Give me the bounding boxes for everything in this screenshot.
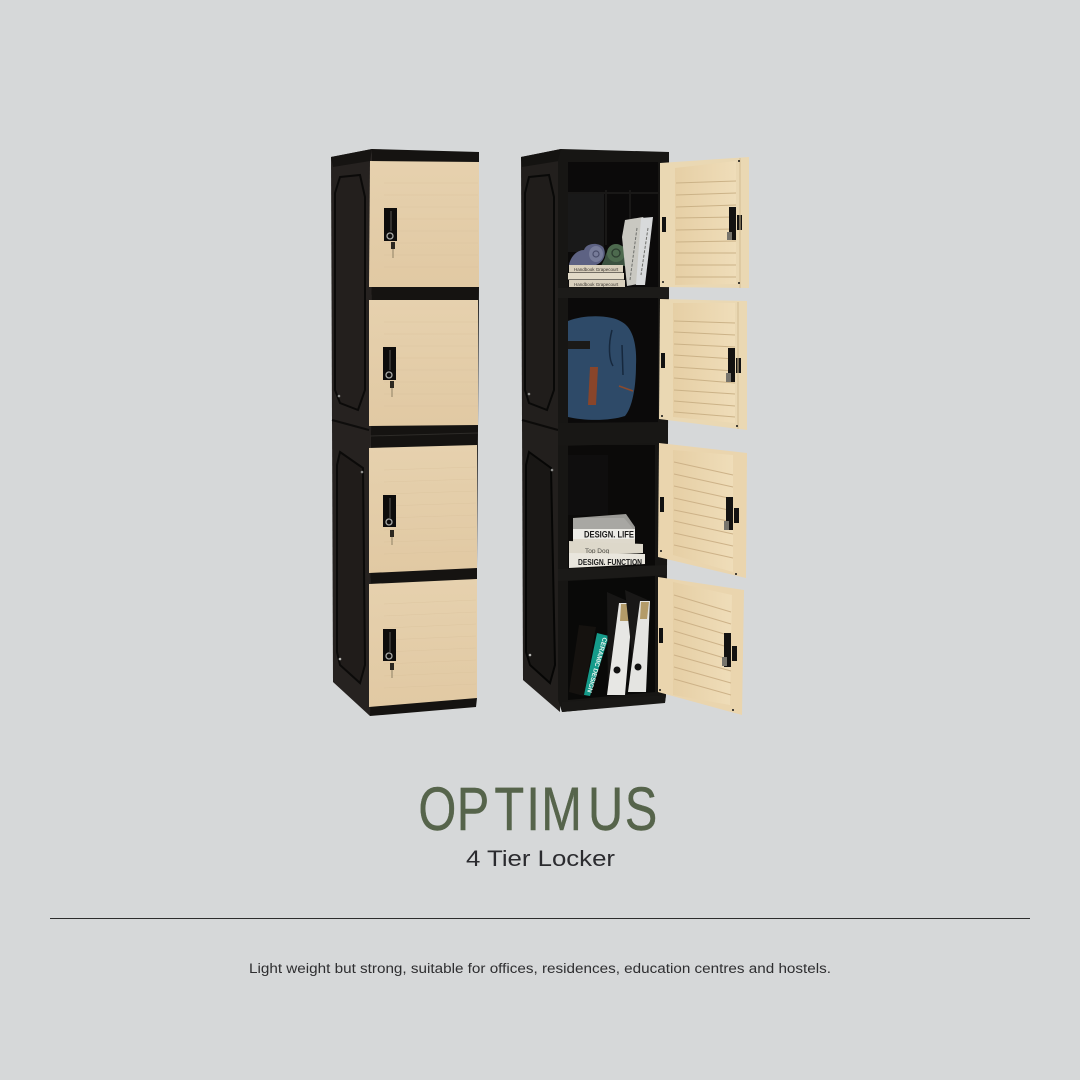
locker side panel (331, 149, 372, 716)
design books stack: Top Dog (585, 548, 610, 555)
lock and key 2 (383, 347, 396, 397)
lock and key 1 (384, 208, 397, 258)
divider line (50, 918, 1030, 919)
teal ceramic design book: CERAMIC DESIGN (585, 636, 608, 694)
backpack (568, 316, 636, 420)
top cabinet cavity (568, 162, 658, 287)
open door 4 (658, 577, 744, 715)
open locker side panel (521, 149, 561, 712)
binder 2 (625, 590, 650, 692)
design books stack: DESIGN. FUNCTION (578, 557, 642, 567)
dark books (569, 625, 596, 696)
product: closed locker (331, 149, 479, 716)
product: open locker with stored items (521, 149, 749, 715)
binder 1 (607, 592, 633, 695)
blankets (569, 244, 629, 266)
lock and key 3 (383, 495, 396, 545)
title: OPTIMUS (418, 775, 657, 843)
door 4 (369, 579, 477, 707)
stacked books top shelf: Handbook Grapecourt (574, 267, 619, 272)
door 1 (369, 161, 479, 287)
door 3 (369, 445, 477, 573)
open locker front frame (558, 149, 669, 712)
door 2 (369, 300, 478, 426)
shelf 2 (558, 565, 667, 581)
stacked books top shelf (568, 265, 625, 287)
base (562, 695, 666, 712)
lock and key 4 (383, 629, 396, 678)
subtitle: 4 Tier Locker (466, 846, 615, 871)
open door 2 (659, 299, 747, 430)
upright books (622, 217, 653, 286)
open door 1 (660, 157, 749, 288)
door faint ribs (384, 183, 478, 688)
third cabinet cavity (568, 445, 655, 569)
design books stack: DESIGN. LIFE (584, 530, 634, 540)
open door 3 (658, 443, 747, 578)
fourth cabinet cavity (568, 576, 655, 700)
second cabinet cavity (568, 298, 658, 423)
divider band (558, 422, 668, 446)
shelf 1 (558, 287, 669, 298)
design books stack (569, 514, 645, 568)
locker front frame (370, 149, 479, 716)
stacked books top shelf: Handbook Grapecourt (574, 282, 619, 287)
description text: Light weight but strong, suitable for offices, residences, education centres and hostels. (249, 961, 831, 976)
